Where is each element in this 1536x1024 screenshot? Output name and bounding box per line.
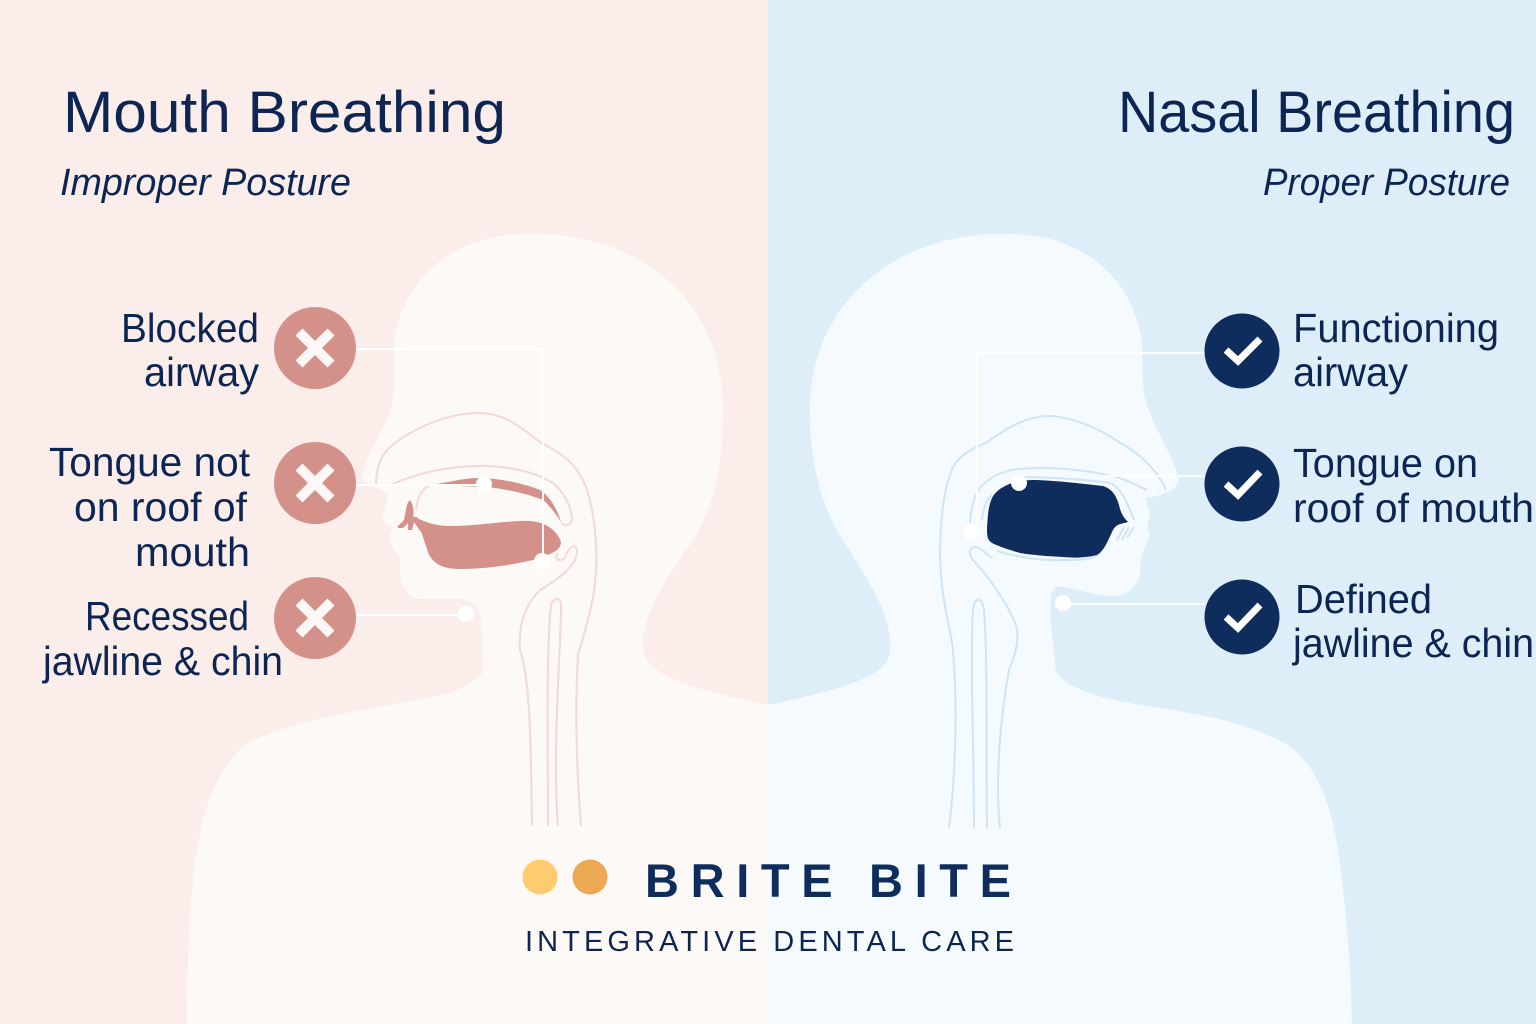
label: blocked airway [121,305,259,395]
icon: cross 2 [274,442,356,524]
subheading: proper posture: Proper Posture [1263,162,1510,204]
label: defined jawline and chin [1292,576,1534,666]
anatomy: left tongue [415,517,561,569]
icon: check 3 [1204,580,1280,654]
label: tongue not on roof of mouth: mouth [135,529,250,575]
label: functioning airway: Functioning [1293,305,1499,351]
logo wordmark: BRITE BITE [645,854,1011,907]
callout lines: right [977,353,1205,604]
anatomy: left upper palate wedge [430,478,561,522]
logo dots [522,860,608,894]
icon: check 1 [1204,314,1280,388]
heading: nasal breathing: Nasal Breathing [1118,80,1515,145]
icon: cross 3 [274,577,356,659]
silhouette: right figure [768,234,1352,1024]
label: functioning airway [1293,305,1499,395]
anatomy: right airway outlines [940,416,1166,828]
label: recessed jawline and chin: jawline & chin [42,638,283,684]
label: recessed jawline and chin: Recessed [85,593,249,639]
subheading: improper posture: Improper Posture [60,162,351,204]
anatomy: right airway space [987,480,1128,558]
panel: mouth breathing background [0,0,768,1024]
icon: cross 1 [274,307,356,389]
heading: mouth breathing: Mouth Breathing [63,80,506,145]
callout dots: right [963,475,1071,611]
logo tagline: INTEGRATIVE DENTAL CARE [525,926,1014,958]
label: recessed jawline and chin [42,593,283,684]
label: tongue not on roof of mouth: Tongue not [49,439,251,485]
anatomy: left teeth [397,500,424,531]
label: tongue on roof of mouth: Tongue on [1293,440,1478,486]
silhouette: left figure [187,234,768,1024]
label: tongue on roof of mouth: roof of mouth [1293,485,1534,531]
label: blocked airway: airway [144,349,259,395]
label: defined jawline and chin: Defined [1295,576,1432,622]
callout dots: left [458,476,550,622]
anatomy: left airway outlines [376,413,596,826]
callout lines: left [355,349,543,615]
label: blocked airway: Blocked [121,305,259,351]
panel: nasal breathing background [768,0,1536,1024]
label: tongue not on roof of mouth: on roof of [74,484,248,530]
label: functioning airway: airway [1293,349,1408,395]
label: tongue on roof of mouth [1293,440,1534,531]
label: tongue not on roof of mouth [49,439,251,575]
icon: check 2 [1204,446,1280,522]
